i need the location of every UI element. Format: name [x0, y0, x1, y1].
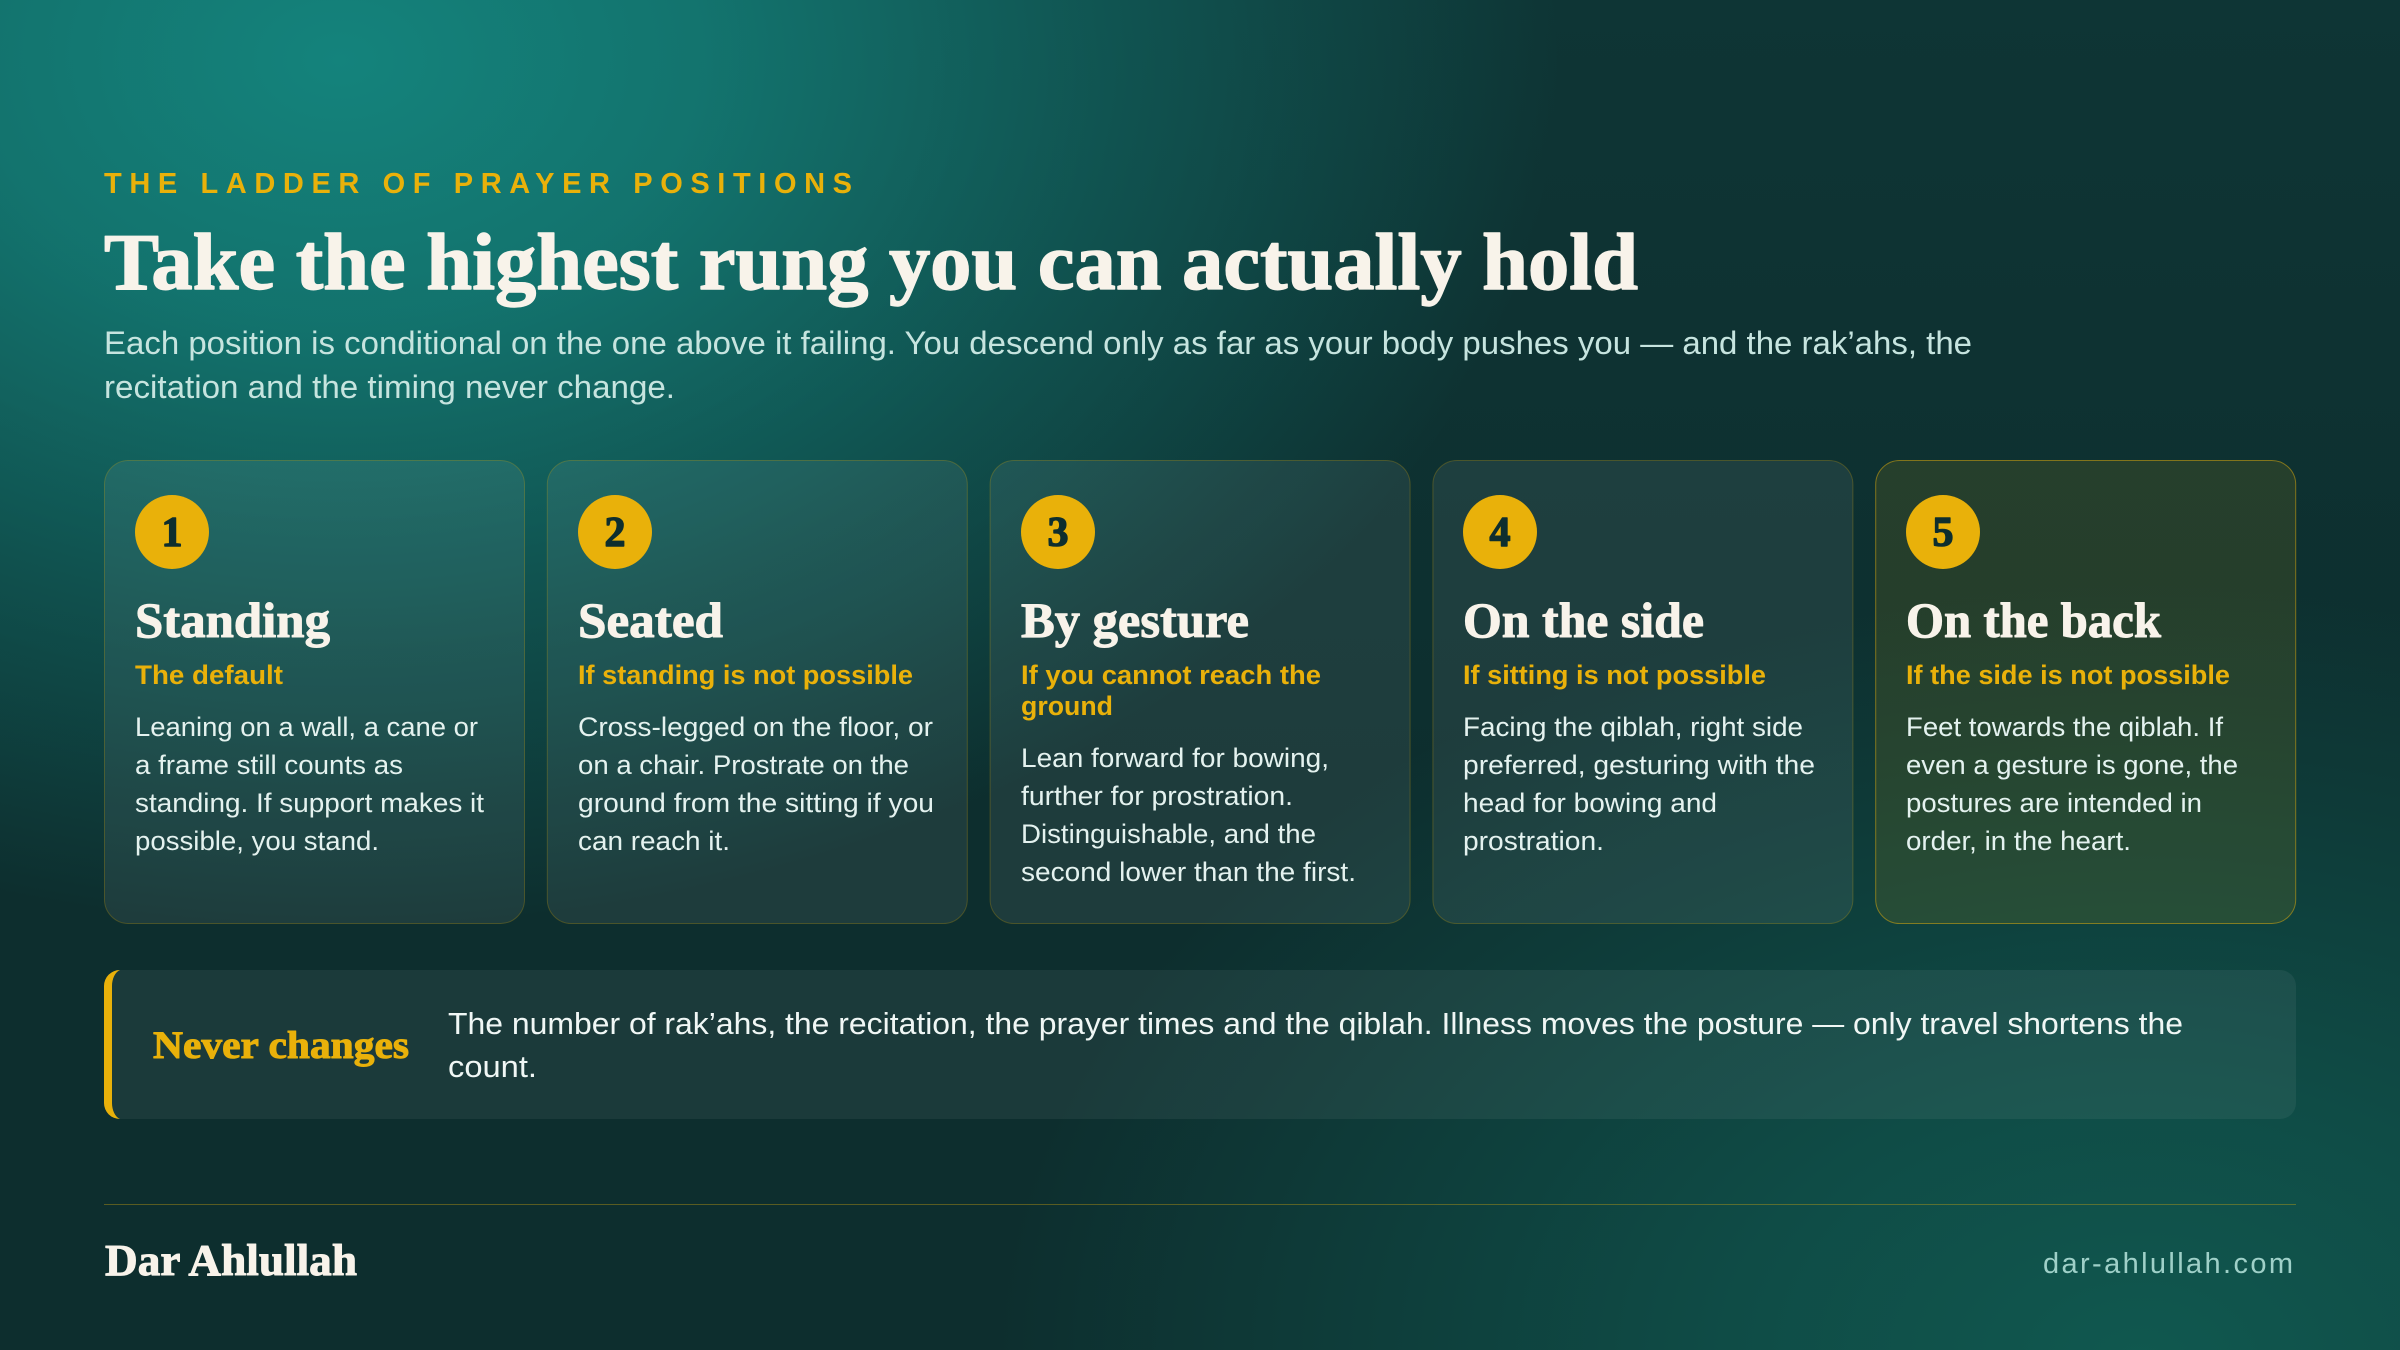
- card 2 body: [578, 712, 934, 856]
- card 5 condition: If the side is not possible: [1906, 660, 2230, 690]
- panel: card 1 standing: [104, 460, 524, 924]
- card 1 body: standing. If support makes it: [135, 788, 485, 818]
- number badge 1: 1: [162, 510, 182, 556]
- card 2 body: on a chair. Prostrate on the: [578, 750, 909, 780]
- subtitle: recitation and the timing never change.: [104, 369, 675, 405]
- website: dar-ahlullah.com: [2043, 1248, 2293, 1280]
- card 3 body: Distinguishable, and the: [1021, 819, 1316, 849]
- card 1 body: [135, 712, 485, 856]
- number badge 1: [135, 495, 209, 569]
- card 3 body: Lean forward for bowing,: [1021, 743, 1329, 773]
- card 5 body: Feet towards the qiblah. If: [1906, 712, 2224, 742]
- card 1 body: possible, you stand.: [135, 826, 379, 856]
- title: Take the highest rung you can actually hold: [104, 219, 1638, 307]
- card 4 body: head for bowing and: [1463, 788, 1717, 818]
- card 1 condition: The default: [135, 660, 283, 690]
- panel: card 4 on the side: [1433, 460, 1853, 924]
- number badge 5: [1906, 495, 1980, 569]
- card 4 body: preferred, gesturing with the: [1463, 750, 1815, 780]
- card 2 condition: If standing is not possible: [578, 660, 913, 690]
- card 4 body: Facing the qiblah, right side: [1463, 712, 1803, 742]
- card 5 heading: On the back: [1906, 592, 2161, 648]
- card 2 body: can reach it.: [578, 826, 730, 856]
- card 4 body: prostration.: [1463, 826, 1604, 856]
- card 5 body: even a gesture is gone, the: [1906, 750, 2238, 780]
- subtitle: Each position is conditional on the one above it failing. You descend only as far as your body pushes you — and the rak’ahs, the: [104, 325, 1972, 361]
- card 3 body: [1021, 743, 1356, 887]
- header block: [104, 168, 1972, 405]
- eyebrow: THE LADDER OF PRAYER POSITIONS: [104, 168, 852, 200]
- callout text: [448, 1006, 2183, 1084]
- footer: [104, 1204, 2296, 1285]
- card 2 heading: Seated: [578, 592, 723, 648]
- card 4 body: [1463, 712, 1815, 856]
- callout: never changes: [104, 970, 2296, 1119]
- number badge 3: [1021, 495, 1095, 569]
- card 1 body: a frame still counts as: [135, 750, 403, 780]
- number badge 2: [578, 495, 652, 569]
- number badge 5: 5: [1932, 510, 1954, 556]
- card 3 condition: ground: [1021, 691, 1113, 721]
- callout accent bar: [104, 970, 120, 1119]
- card 4 condition: If sitting is not possible: [1463, 660, 1766, 690]
- panel: card 2 seated: [547, 460, 967, 924]
- card 5 body: [1906, 712, 2238, 856]
- callout label: Never changes: [153, 1024, 409, 1067]
- card 3 body: second lower than the first.: [1021, 857, 1356, 887]
- panel: card 5 on the back: [1876, 460, 2296, 924]
- card 2 body: Cross-legged on the floor, or: [578, 712, 933, 742]
- number badge 4: 4: [1490, 510, 1510, 556]
- card 5 body: order, in the heart.: [1906, 826, 2131, 856]
- number badge 2: 2: [604, 510, 626, 556]
- card 2 body: ground from the sitting if you: [578, 788, 934, 818]
- subtitle: [104, 325, 1972, 405]
- card 3 condition: If you cannot reach the: [1021, 660, 1321, 690]
- number badge 4: [1463, 495, 1537, 569]
- card 1 heading: Standing: [135, 592, 330, 648]
- card 3 body: further for prostration.: [1021, 781, 1293, 811]
- panel: card 3 by gesture: [990, 460, 1410, 924]
- card 4 heading: On the side: [1463, 592, 1704, 648]
- number badge 3: 3: [1048, 510, 1068, 556]
- card 1 body: Leaning on a wall, a cane or: [135, 712, 478, 742]
- card 5 body: postures are intended in: [1906, 788, 2202, 818]
- callout text: The number of rak’ahs, the recitation, the prayer times and the qiblah. Illness moves the posture — only travel shortens the: [448, 1006, 2183, 1041]
- card 3 heading: By gesture: [1021, 592, 1249, 648]
- brand name: Dar Ahlullah: [105, 1236, 357, 1285]
- card 3 condition: [1021, 660, 1321, 721]
- callout text: count.: [448, 1049, 537, 1084]
